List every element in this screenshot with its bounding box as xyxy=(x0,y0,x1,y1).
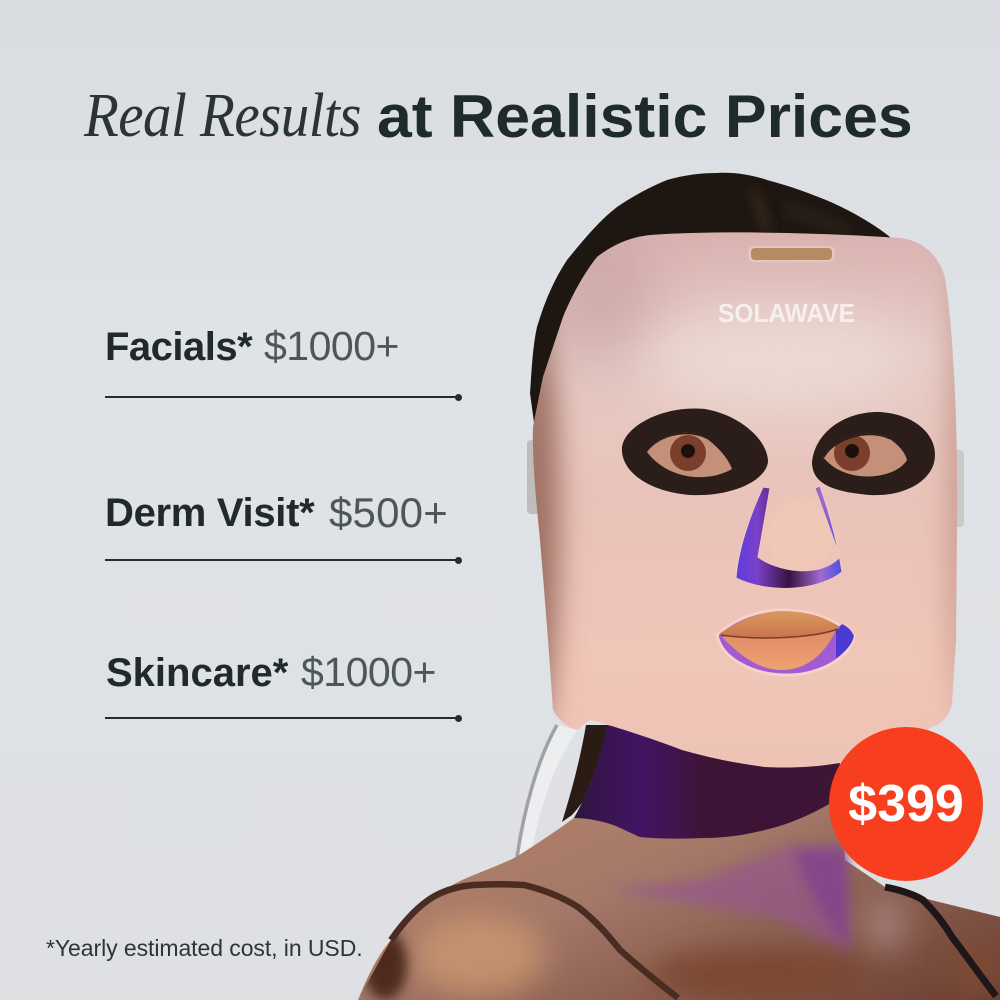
row: facials: Facials* xyxy=(105,325,252,369)
left strap of mask xyxy=(527,440,543,514)
cable xyxy=(516,725,578,857)
price badge xyxy=(829,727,983,881)
row: facials xyxy=(105,323,399,369)
row: derm visit: Derm Visit* xyxy=(105,491,314,535)
price badge: $399 xyxy=(848,775,964,833)
left eye xyxy=(622,408,768,495)
row: derm visit xyxy=(105,489,448,536)
neck and shoulders xyxy=(358,725,1000,1000)
title: at Realistic Prices xyxy=(377,83,913,150)
hair xyxy=(530,173,890,430)
row: skincare: Skincare* xyxy=(106,651,288,695)
mask top vent xyxy=(748,246,835,262)
ponytail xyxy=(562,725,608,822)
neck shadow band xyxy=(574,725,840,839)
right strap xyxy=(885,887,996,996)
mouth opening xyxy=(717,610,854,675)
brand name: SOLAWAVE xyxy=(718,298,855,328)
row: derm visit: $500+ xyxy=(329,489,448,536)
title xyxy=(84,82,913,150)
row: facials: $1000+ xyxy=(264,323,399,369)
left strap xyxy=(391,884,678,998)
right eye xyxy=(812,412,935,495)
title: Real Results xyxy=(84,82,361,150)
mask xyxy=(511,230,974,768)
row: skincare xyxy=(106,649,436,695)
row: skincare: $1000+ xyxy=(301,649,436,695)
photo: woman wearing LED mask xyxy=(358,172,1000,1000)
footnote: *Yearly estimated cost, in USD. xyxy=(46,935,363,961)
nose opening xyxy=(736,486,842,588)
right strap of mask xyxy=(950,450,964,527)
